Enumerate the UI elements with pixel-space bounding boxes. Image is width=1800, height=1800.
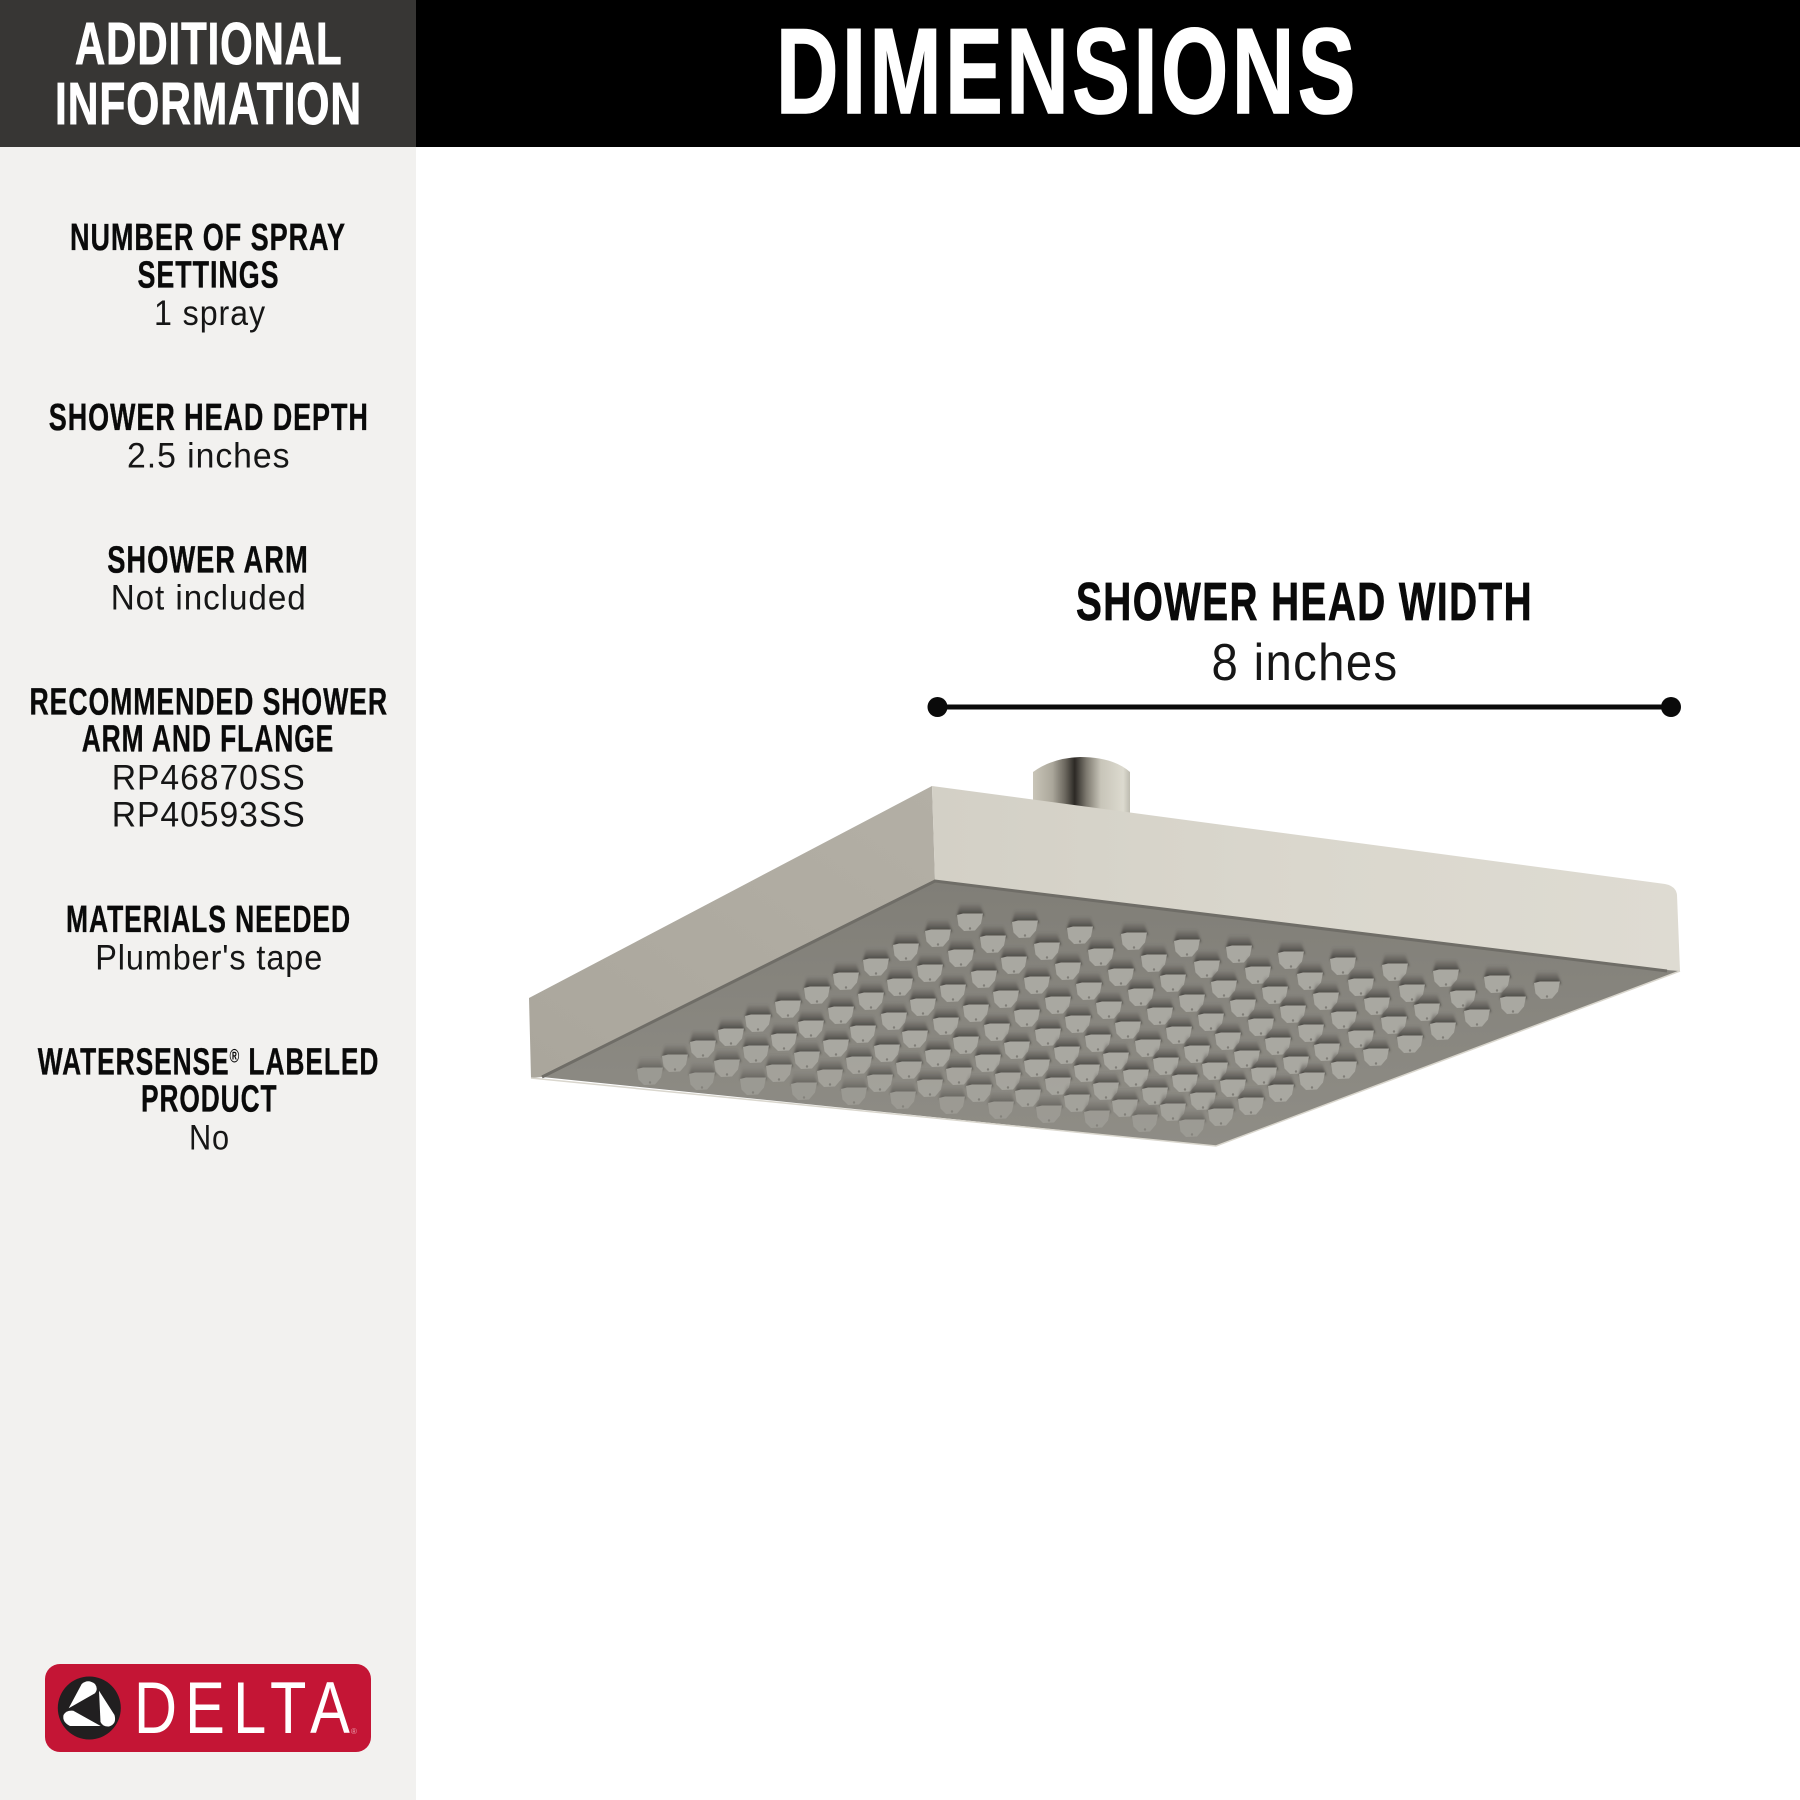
- logo: delta: ®: [351, 1727, 357, 1736]
- spec: number of spray settings: NUMBER OF SPRAY: [70, 217, 346, 259]
- spec: shower arm: SHOWER ARM: [107, 539, 309, 581]
- left side face: [529, 786, 935, 1078]
- arrow: width dimension line: [928, 697, 1681, 717]
- spec: recommended shower arm and flange: ARM AND FLANGE: [82, 719, 334, 761]
- title: dimensions: DIMENSIONS: [776, 3, 1359, 139]
- spec: shower arm: Not included: [111, 577, 307, 617]
- spec: materials needed: Plumber's tape: [95, 937, 323, 977]
- header: additional information: ADDITIONAL: [75, 10, 342, 77]
- panel: additional information sidebar: [0, 147, 416, 1800]
- spec: recommended shower arm and flange: RP40593SS: [112, 795, 306, 835]
- front face: [932, 786, 1680, 971]
- shower arm connector: [1033, 757, 1130, 820]
- product: shower head: [529, 757, 1680, 1146]
- title: dimensions: [416, 0, 1800, 147]
- spray plate with nozzles: [531, 880, 1680, 1146]
- spec: watersense labeled product: LABELED: [240, 1041, 379, 1083]
- spec: watersense labeled product: WATERSENSE: [38, 1041, 313, 1083]
- icon: delta triangle mark: [58, 1676, 121, 1740]
- callout: shower head width: SHOWER HEAD WIDTH: [1076, 572, 1533, 632]
- spec: number of spray settings: [70, 217, 346, 333]
- spec: watersense labeled product: PRODUCT: [141, 1079, 278, 1121]
- spec: shower head depth: SHOWER HEAD DEPTH: [49, 397, 369, 439]
- spec: recommended shower arm and flange: RP46870SS: [112, 757, 306, 797]
- spec: materials needed: [66, 899, 351, 977]
- header: additional information: INFORMATION: [55, 70, 362, 137]
- spec: watersense labeled product: No: [189, 1117, 230, 1157]
- spec: shower arm: [107, 539, 309, 617]
- spec: shower head depth: [49, 397, 369, 476]
- spec: watersense labeled product: [38, 1041, 379, 1157]
- spec: number of spray settings: SETTINGS: [138, 254, 280, 296]
- callout: shower head width: [928, 572, 1681, 717]
- callout: shower head width: 8 inches: [1212, 634, 1398, 692]
- spec: recommended shower arm and flange: [30, 681, 388, 835]
- header: additional information: [0, 0, 416, 147]
- spec: materials needed: MATERIALS NEEDED: [66, 899, 351, 941]
- logo: delta: [45, 1664, 371, 1752]
- spec: number of spray settings: 1 spray: [154, 293, 266, 333]
- spec: shower head depth: 2.5 inches: [127, 436, 290, 476]
- spec: watersense labeled product: ®: [230, 1046, 240, 1067]
- spec: recommended shower arm and flange: RECOMMENDED SHOWER: [30, 681, 388, 723]
- logo: delta: DELTA: [134, 1668, 358, 1749]
